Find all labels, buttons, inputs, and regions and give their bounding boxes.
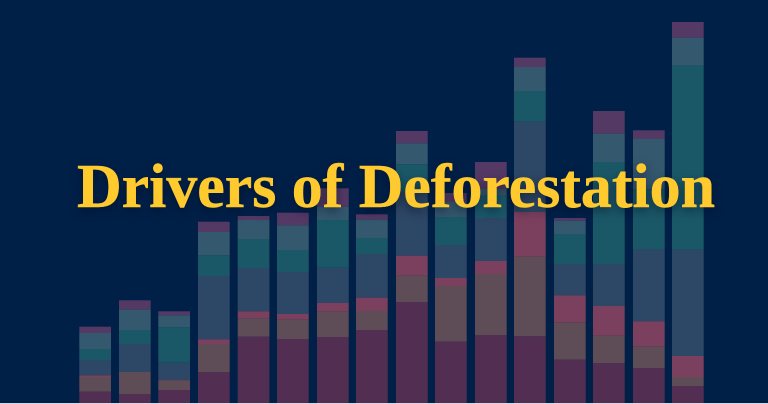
bar 8 bbox=[356, 214, 388, 403]
bar 3 bbox=[158, 311, 190, 403]
bar 9 bbox=[396, 131, 428, 403]
bar 12 bbox=[514, 58, 546, 403]
bar 6 bbox=[277, 213, 309, 403]
bar 16 bbox=[672, 22, 704, 403]
bar 5 bbox=[238, 216, 269, 403]
bar 4 bbox=[198, 222, 230, 403]
bar 14 bbox=[593, 111, 625, 403]
bar 10 bbox=[435, 193, 467, 403]
bar 15 bbox=[633, 130, 665, 403]
bar 1 bbox=[79, 327, 111, 403]
bar 11 bbox=[475, 162, 507, 403]
bar 7 bbox=[317, 188, 349, 403]
bar 2 bbox=[119, 300, 151, 403]
title: Drivers of Deforestation bbox=[77, 153, 715, 221]
bar 13 bbox=[554, 218, 586, 403]
stacked bar chart bbox=[79, 22, 704, 403]
